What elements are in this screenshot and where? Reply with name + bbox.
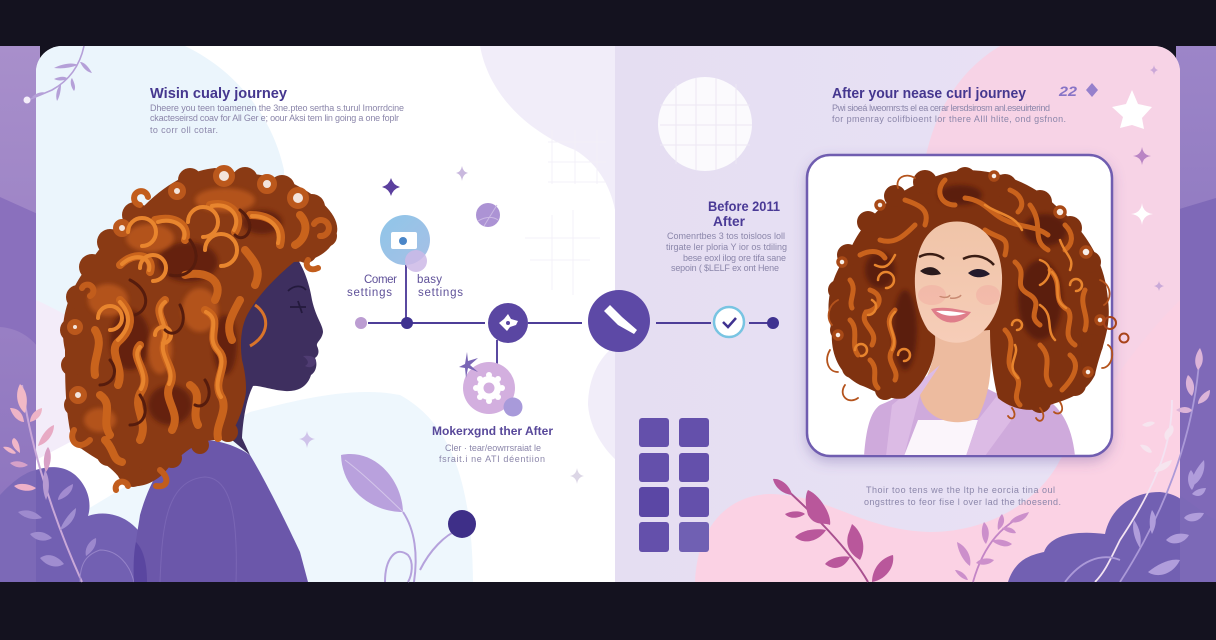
right heading block <box>832 85 1066 124</box>
middle caption: Cler · tear/eowrrsraiat le <box>445 443 541 453</box>
left body text <box>150 103 404 135</box>
photo card <box>807 155 1112 456</box>
bottom caption: Thoir too tens we the ltp he eorcia tina oul <box>866 485 1055 495</box>
white top <box>904 420 978 456</box>
icon: camera badge <box>380 215 430 272</box>
lavender lobe lower right of left page <box>588 345 616 460</box>
icon: small badge and diamond <box>1058 83 1098 99</box>
wispy outer strands <box>827 176 1112 421</box>
right heading block: Pwi sioeá lweomrs:ts el ea cerar lersdsirosm anl.eseuirterind <box>832 103 1050 113</box>
lapels <box>886 365 1015 456</box>
icon: large leaf with stem <box>341 454 476 582</box>
highlights <box>855 205 1082 378</box>
timeline <box>355 215 779 416</box>
neck <box>920 330 991 422</box>
before after text block: sepoin ( $LELF ex ont Hene <box>671 263 779 273</box>
portrait curls <box>827 172 1112 421</box>
purple cloud bottom left <box>36 467 138 582</box>
sparkles left page <box>299 166 584 484</box>
lavender top right of left page <box>480 46 616 215</box>
before after text block <box>666 198 787 273</box>
stray curl on face <box>250 305 266 346</box>
timeline dot end <box>767 317 779 329</box>
icon: brush badge <box>588 290 650 352</box>
nose <box>940 295 961 298</box>
blazer <box>864 389 1075 455</box>
right heading block: After your nease curl journey <box>832 85 1027 102</box>
ribbons <box>850 180 1086 405</box>
middle caption: Mokerxgnd ther After <box>432 426 554 438</box>
stray ringlets <box>1104 317 1128 342</box>
left body text: ckacteseirsd coav for All Ger e; oour Aksi tem lin going a one foplr <box>150 113 399 123</box>
edge ringlets <box>70 168 306 401</box>
icon: square grid <box>639 418 709 552</box>
timeline labels: Comer <box>364 274 397 286</box>
icon: check badge <box>714 307 744 337</box>
pale blue blob top left <box>36 46 284 314</box>
side cloud left overflow <box>0 470 36 582</box>
icon: grid circle <box>658 77 752 171</box>
hair lumpy outline <box>60 167 337 487</box>
edge ringlets <box>834 172 1104 376</box>
hair lumpy outline <box>828 167 1108 413</box>
timeline labels <box>347 274 463 299</box>
hair dark patches <box>865 185 1067 370</box>
illustration: profile woman with curly hair <box>60 167 337 582</box>
right purple side strip <box>1176 46 1216 582</box>
vertical connectors <box>406 262 497 365</box>
left body text: Dheere you teen toamenen the 3ne.pteo sertha s.turul Imorrdcine <box>150 103 404 113</box>
left purple side strip <box>0 46 40 582</box>
card frame <box>807 155 1112 456</box>
bottom dark band <box>0 582 1216 640</box>
right sparkles and star <box>1112 65 1164 291</box>
before after text block: Before 2011 <box>708 198 780 214</box>
timeline labels: settings <box>418 287 463 299</box>
left body text: to corr oll cotar. <box>150 125 218 135</box>
icon: purple ball <box>476 203 500 227</box>
side cloud right overflow <box>1180 496 1216 582</box>
sleeve line <box>160 477 236 582</box>
left heading block <box>150 85 404 135</box>
before after text block: tirgate ler ploria Y ior os tdiling <box>666 242 787 252</box>
timeline dot second <box>401 317 413 329</box>
eyes <box>920 267 990 277</box>
brows <box>919 254 994 265</box>
timeline labels: basy <box>417 274 442 286</box>
hair curls <box>70 168 329 490</box>
icon: magenta sprig <box>773 479 893 582</box>
purple cloud bottom right <box>1008 492 1180 582</box>
top dark band <box>0 0 1216 46</box>
middle caption <box>432 426 554 464</box>
cheek blush <box>918 285 946 305</box>
icon: top left sprig <box>24 46 92 104</box>
eye and brow <box>288 286 306 313</box>
icon: pale and lilac sprig right <box>1065 348 1210 582</box>
icon: lower left sprig <box>3 384 134 582</box>
before after text block: bese eoxl ilog ore tifa sane <box>683 253 786 263</box>
ribbons <box>95 204 305 462</box>
smile <box>931 308 971 322</box>
portrait <box>864 330 1075 456</box>
portrait hair <box>827 167 1128 421</box>
icon: flower badge <box>463 362 522 416</box>
timeline lines <box>368 322 768 324</box>
pale lilac wash on left page <box>36 300 70 460</box>
pale blue blob lower left page <box>88 392 473 582</box>
left title: Wisin cualy journey <box>150 85 288 102</box>
icon: light magenta sprig <box>955 512 1029 582</box>
bottom caption: ongsttres to feor fise l over lad the thoesend. <box>864 497 1061 507</box>
shoulders <box>134 440 308 582</box>
before after text block: After <box>713 213 746 229</box>
before after text block: Comenrtbes 3 tos toisloos loll <box>667 231 785 241</box>
hair mid patches <box>84 188 255 432</box>
middle caption: fsrait.i ne ATI déentiion <box>439 454 545 464</box>
right heading block: for pmenray colifbioent lor there AIll hlite, ond gsfnon. <box>832 114 1066 124</box>
lips <box>303 356 316 367</box>
left page background <box>36 46 616 582</box>
pink blob top right <box>926 46 1180 380</box>
shoulder shadow <box>134 542 147 582</box>
timeline labels: settings <box>347 287 392 299</box>
icon: gear badge <box>488 303 528 343</box>
hair darker patches <box>110 210 282 425</box>
portrait face <box>915 222 1002 343</box>
dark creases <box>100 210 250 425</box>
hair mass <box>63 168 337 486</box>
icon: small badge and diamond: 22 <box>1058 83 1077 99</box>
right page background <box>615 46 1180 582</box>
timeline dot start <box>355 317 367 329</box>
silhouette face <box>232 262 323 455</box>
pink blob bottom <box>695 330 1180 582</box>
bottom caption <box>864 485 1061 507</box>
highlights <box>98 205 279 397</box>
faint grid decoration <box>525 130 606 295</box>
